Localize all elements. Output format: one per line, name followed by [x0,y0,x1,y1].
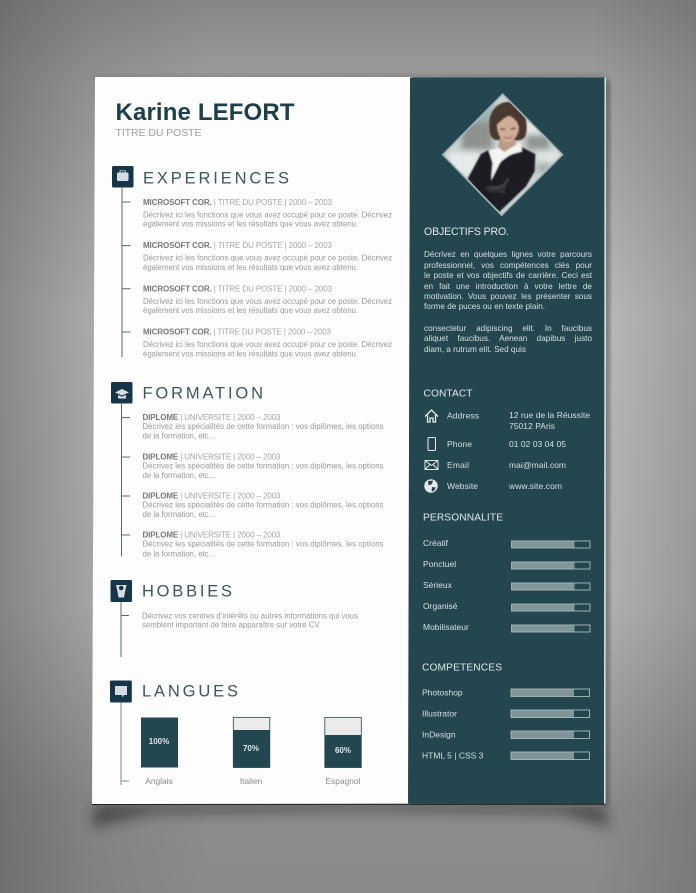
language bar: Anglais: Anglais [145,776,173,786]
experience entry 1: MICROSOFT COR. | TITRE DU POSTE | 2000 – 2003 [143,198,333,207]
section: objectifs pro [424,226,592,314]
skill: Photoshop: Photoshop [422,688,463,698]
contact row: address: Address [447,410,479,420]
dark right column [408,78,605,804]
neck [498,137,516,152]
contact row: address: 75012 PAris [509,421,555,431]
skill: Sérieux: Sérieux [423,580,453,590]
heading: contact: CONTACT [424,389,472,400]
skill: Ponctuel: Ponctuel [423,559,456,569]
jacket [468,147,535,212]
heading: personnalite: PERSONNALITE [423,513,503,524]
skill: Mobilisateur: Mobilisateur [423,622,469,632]
icon: envelope [425,460,438,470]
formation entry 1: Décrivez les spécialités de cette formation : vos diplômes, les options [142,422,384,431]
language bar: Espagnol [324,718,362,786]
experience entry 2 [143,241,392,272]
header: name and job title: TITRE DU POSTE [116,127,202,139]
objectifs second paragraph: diam, a rutrum elit. Sed quis [424,345,526,354]
skill: Créatif: Créatif [423,538,449,548]
contact row: phone: 01 02 03 04 05 [509,439,566,449]
icon: globe [424,479,438,493]
arm fold [489,178,509,188]
language bar: Italien: 70% [243,744,259,753]
header: name and job title [116,99,295,139]
section: hobbies [110,580,358,657]
timeline: experiences [122,187,130,357]
formation entry 2 [142,452,384,480]
skill: Illustrator [422,708,590,718]
skill: InDesign: InDesign [422,730,456,740]
contact row: website: www.site.com [508,481,562,491]
skill: HTML 5 | CSS 3: HTML 5 | CSS 3 [422,750,484,760]
icon: graduation cap [111,382,132,404]
formation entry 1: de la formation, etc… [142,432,216,440]
formation entry 4: DIPLOME | UNIVERSITE | 2000 – 2003 [142,530,281,540]
objectifs paragraph: forme de puces ou en texte plain. [424,302,545,311]
objectifs second paragraph: consectetur adipiscing elit. In faucibus [424,324,592,333]
formation entry 3: Décrivez les spécialités de cette formation : vos diplômes, les options [142,500,384,510]
objectifs second paragraph [424,324,592,358]
contact row: email [425,460,566,470]
skill: Ponctuel [423,559,590,569]
objectifs paragraph: professionnel, vos compétences clés pour [424,261,592,270]
language bar: Espagnol: 60% [335,746,351,755]
header: name and job title: Karine LEFORT [116,99,295,126]
contact row: email: Email [447,460,469,470]
heading: hobbies: HOBBIES [142,582,232,600]
contact row: phone [428,438,566,450]
hobbies text [142,612,358,630]
section: experiences [112,166,392,358]
experience entry 3: Décrivez ici les fonctions que vous avez occupé pour ce poste. Décrivez [143,297,392,306]
timeline: hobbies [121,602,129,657]
section: formation [111,382,384,558]
contact row: address: 12 rue de la Réussite [509,410,590,420]
experience entry 1 [143,198,392,229]
icon: hobbies badge [110,580,132,602]
language bar: Espagnol: Espagnol [326,776,361,786]
heading: experiences: EXPERIENCES [143,169,289,187]
experience entry 1: Décrivez ici les fonctions que vous avez occupé pour ce poste. Décrivez [143,210,392,220]
hair [489,102,527,141]
objectifs paragraph: motivation. Vous pouvez les présenter sous [424,292,592,301]
hobbies text: Décrivez vos centres d’intérêts ou autres informations qui vous [142,612,358,620]
formation entry 1 [142,413,384,440]
formation entry 4 [142,530,384,558]
skill: Illustrator: Illustrator [422,708,457,718]
heading: competences: COMPETENCES [422,663,502,674]
contact row: address [425,410,590,431]
timeline: langues [121,702,129,785]
section: contact [424,389,590,493]
experience entry 4: également vos missions et les résultats que vous avez obtenu. [143,349,358,358]
heading: formation: FORMATION [142,384,263,402]
experience entry 2: Décrivez ici les fonctions que vous avez occupé pour ce poste. Décrivez [143,254,392,263]
experience entry 4: MICROSOFT COR. | TITRE DU POSTE | 2000 – 2003 [143,328,332,337]
contact row: website: Website [447,481,478,491]
objectifs paragraph: en fait une introduction à votre lettre de [424,282,592,291]
formation entry 4: Décrivez les spécialités de cette formation : vos diplômes, les options [142,540,384,548]
formation entry 3: DIPLOME | UNIVERSITE | 2000 – 2003 [142,492,281,500]
skill: Organisé: Organisé [423,601,458,611]
formation entry 3 [142,492,384,519]
formation entry 2: Décrivez les spécialités de cette formation : vos diplômes, les options [142,462,384,470]
skill: Photoshop [422,688,590,698]
skill: InDesign [422,730,590,740]
contact row: phone: Phone [447,439,472,449]
face [497,116,519,143]
language bar: Italien [233,718,270,786]
skill: Mobilisateur [423,622,590,632]
shirt [489,142,522,179]
contact row: email: mai@mail.com [509,460,566,470]
experience entry 1: également vos missions et les résultats que vous avez obtenu. [143,220,358,229]
skill: Créatif [423,538,590,548]
heading: objectifs pro: OBJECTIFS PRO. [424,226,509,238]
section: personnalite [423,513,590,632]
icon: briefcase [112,166,134,188]
hobbies text: semblent important de faire apparaître sur votre CV. [142,621,321,630]
icon: phone [428,438,436,450]
section: langues [110,680,362,786]
formation entry 2: DIPLOME | UNIVERSITE | 2000 – 2003 [142,452,281,462]
page shadow [92,74,610,828]
experience entry 2: également vos missions et les résultats que vous avez obtenu. [143,263,358,272]
objectifs paragraph: le poste et vos objectifs de carrière. Ceci est [424,271,592,280]
language bar: Italien: Italien [240,776,263,786]
section: competences [422,663,590,760]
contact row: website [424,479,562,493]
language bar: Anglais [141,718,178,786]
experience entry 4: Décrivez ici les fonctions que vous avez occupé pour ce poste. Décrivez [143,340,392,349]
portrait photo in diamond frame [442,93,564,216]
icon: speech bubble [110,680,132,702]
skill: HTML 5 | CSS 3 [422,750,590,760]
heading: langues: LANGUES [142,683,238,701]
formation entry 3: de la formation, etc… [142,510,216,519]
timeline: formation [122,403,130,556]
experience entry 3 [143,284,392,315]
skill: Organisé [423,601,590,611]
resume page [92,77,606,805]
formation entry 1: DIPLOME | UNIVERSITE | 2000 – 2003 [142,413,281,422]
skill: Sérieux [423,580,590,590]
objectifs paragraph: Décrivez en quelques lignes votre parcours [424,250,592,259]
language bar: Anglais: 100% [149,737,169,746]
objectifs paragraph [424,250,592,314]
experience entry 3: également vos missions et les résultats que vous avez obtenu. [143,306,358,315]
experience entry 3: MICROSOFT COR. | TITRE DU POSTE | 2000 – 2003 [143,284,333,293]
objectifs second paragraph: aliquet faucibus. Aenean dapibus justo [424,334,592,343]
formation entry 2: de la formation, etc… [142,471,216,480]
icon: house [425,410,438,422]
white left column [92,77,412,804]
formation entry 4: de la formation, etc… [142,550,216,558]
experience entry 4 [143,328,392,358]
experience entry 2: MICROSOFT COR. | TITRE DU POSTE | 2000 – 2003 [143,241,333,250]
